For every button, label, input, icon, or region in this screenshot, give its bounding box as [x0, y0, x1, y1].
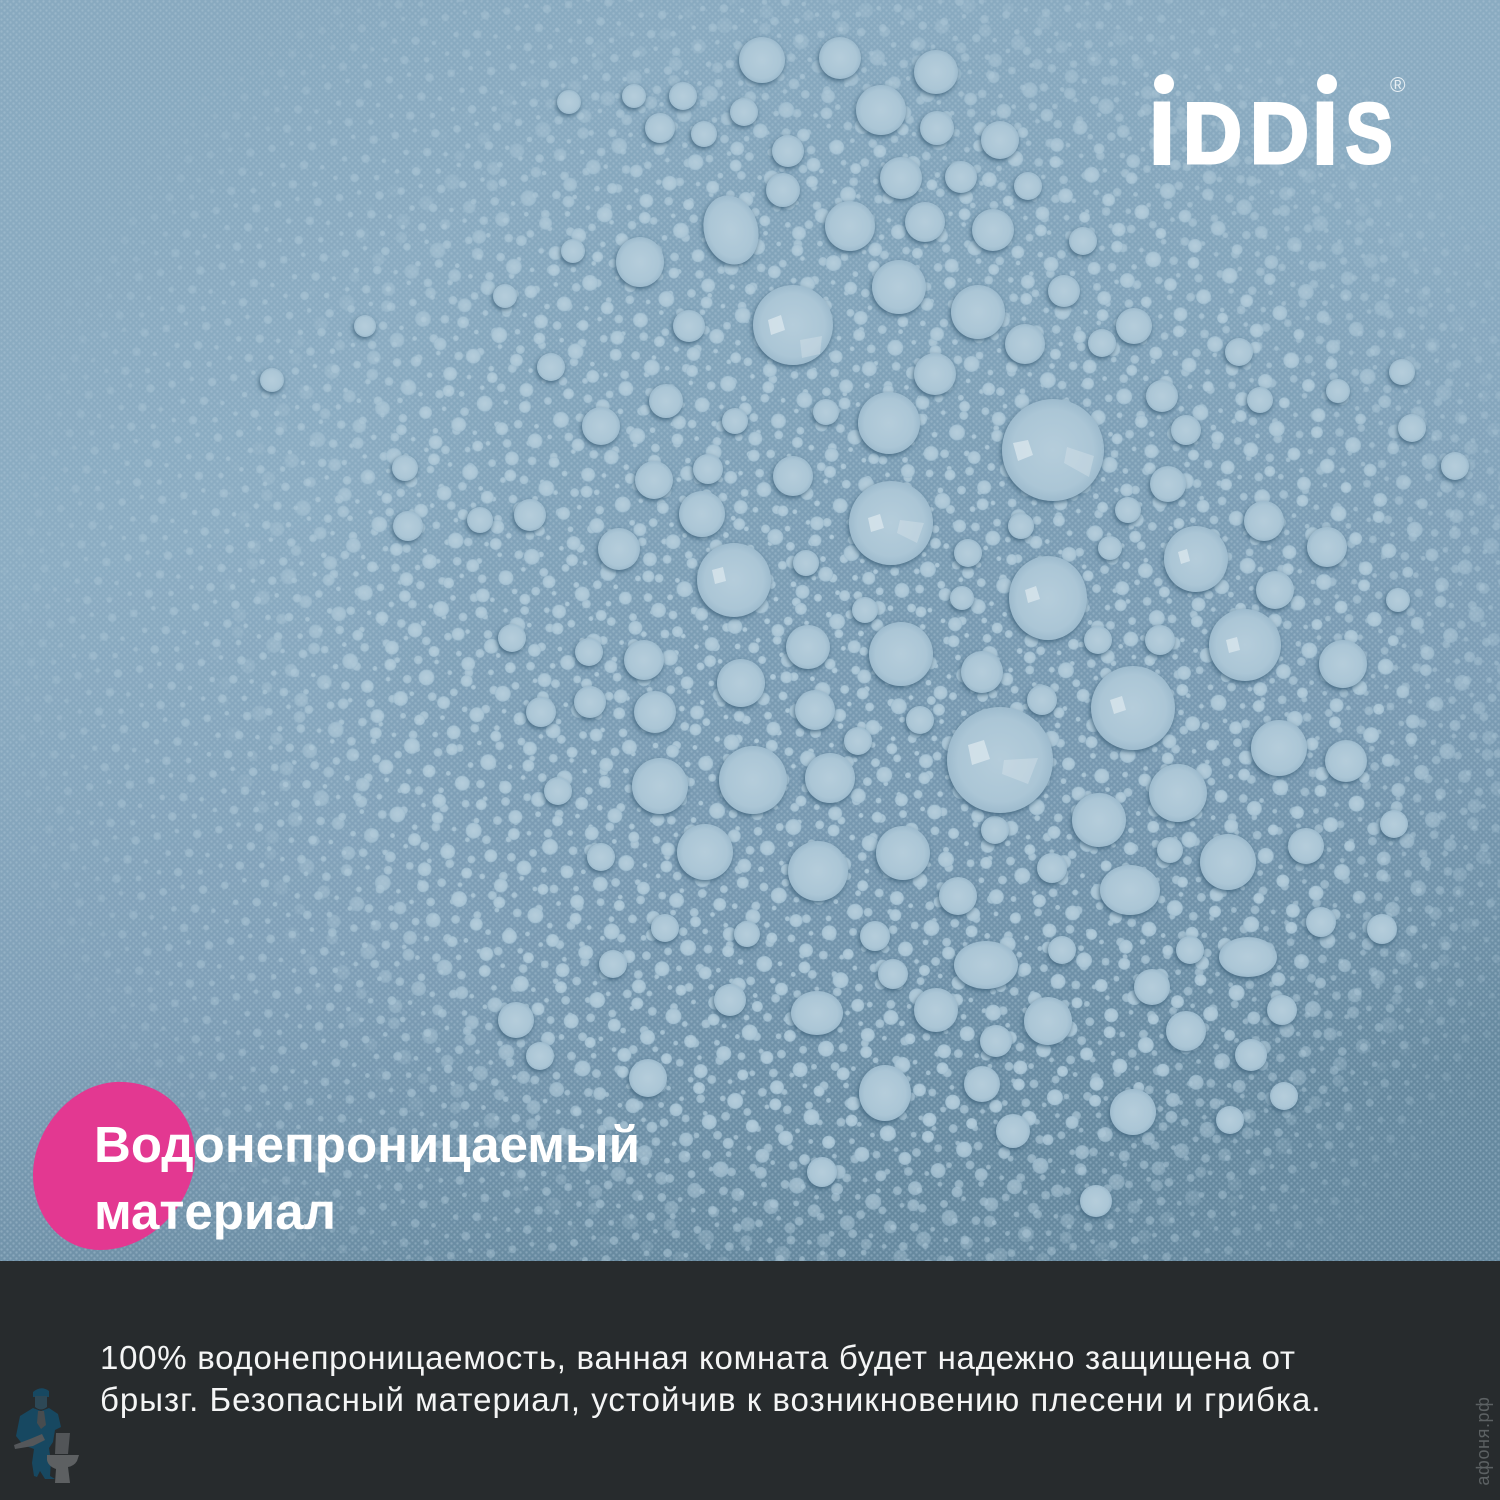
heading: материал	[94, 1183, 336, 1240]
watermark: афоня.рф: афоня.рф	[1473, 1396, 1493, 1486]
logo: IDDIS: D	[1250, 86, 1309, 182]
heading	[94, 1116, 640, 1240]
bottom dark band	[0, 1261, 1500, 1500]
body text	[100, 1339, 1322, 1418]
droplet highlights	[712, 315, 1240, 784]
large droplets	[598, 37, 1367, 1135]
logo: IDDIS	[1150, 74, 1406, 182]
heading: Водонепроницаемый	[94, 1116, 640, 1173]
body text: 100% водонепроницаемость, ванная комната будет надежно защищена от	[100, 1339, 1296, 1376]
logo: IDDIS: I	[1313, 86, 1337, 182]
icon: plumber with toilet	[14, 1388, 79, 1483]
pink blob	[33, 1082, 195, 1250]
logo: IDDIS: ®	[1390, 74, 1406, 97]
logo: IDDIS: S	[1345, 86, 1393, 182]
body text: брызг. Безопасный материал, устойчив к возникновению плесени и грибка.	[100, 1381, 1322, 1418]
medium droplets	[260, 82, 1469, 1217]
logo: IDDIS: D	[1183, 86, 1242, 182]
logo: IDDIS: I	[1150, 86, 1174, 182]
